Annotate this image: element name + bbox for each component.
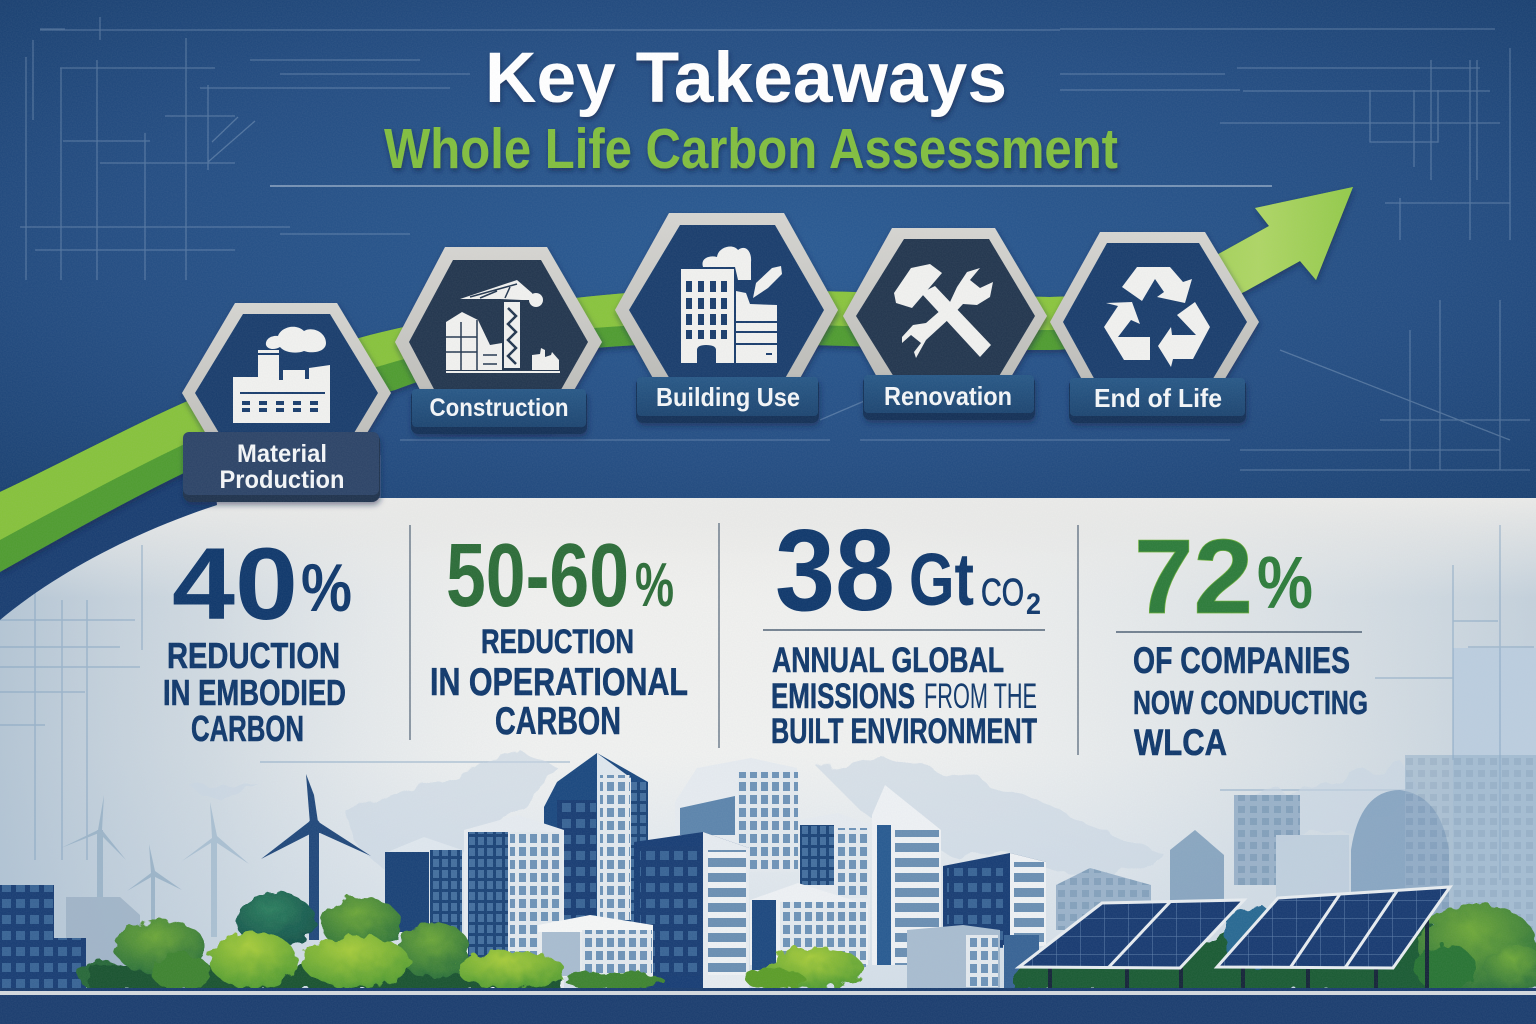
stat: 50-60% reduction in operational carbon: IN OPERATIONAL [430,661,688,704]
step: Renovation [843,228,1047,420]
stat: 50-60% reduction in operational carbon [430,526,688,743]
wrench [902,268,993,358]
recycle arrow right [1158,302,1210,367]
stat: 72% of companies conducting WLCA: NOW CONDUCTING [1133,684,1368,721]
stat: 50-60% reduction in operational carbon: 50-60 [446,526,629,626]
stat: 50-60% reduction in operational carbon: CARBON [495,700,621,743]
stat: 50-60% reduction in operational carbon: % [635,551,674,620]
hammer handle [921,286,991,357]
label: End of Life [1069,378,1246,423]
label: Construction [411,389,587,434]
icon: recycling arrows [1104,267,1210,367]
label: End of Life: End of Life [1094,383,1222,413]
step: Construction [395,247,602,434]
panel: statistics background [0,498,1536,993]
title: Key Takeaways [485,39,1007,118]
panel: blueprint header background [0,0,1536,500]
recycle arrow left [1104,302,1150,360]
recycle arrow top [1122,267,1192,303]
illustration: trees behind solar panels [1014,904,1536,992]
icon: office building with pencil [681,246,782,363]
stat: 40% reduction in embodied carbon: CARBON [191,708,304,749]
stat: 38 Gt CO2 annual global emissions: ANNUAL GLOBAL [772,641,1004,680]
label: Building Use: Building Use [656,382,800,412]
stat: 38 Gt CO2 annual global emissions: BUILT ENVIRONMENT [771,712,1037,751]
stat: 38 Gt CO2 annual global emissions [763,505,1045,751]
stat: 72% of companies conducting WLCA: 72 [1134,518,1253,636]
illustration: green trees [78,893,863,991]
hammer head [894,264,942,308]
column dividers [410,523,1078,755]
stat: 38 Gt CO2 annual global emissions: EMISSIONS [771,677,915,716]
label: Renovation [863,375,1035,420]
stat: 40% reduction in embodied carbon: % [301,550,352,626]
illustration: faded background skyline [66,755,1536,985]
step: End of Life [1050,232,1259,423]
stat: 40% reduction in embodied carbon: 40 [172,527,298,641]
stat: 72% of companies conducting WLCA: WLCA [1134,722,1227,763]
stat: 38 Gt CO2 annual global emissions: CO [981,572,1024,614]
subtitle: Whole Life Carbon Assessment [384,117,1118,181]
icon: hammer and wrench [894,264,993,358]
stat: 72% of companies conducting WLCA [1116,518,1368,763]
stat: 40% reduction in embodied carbon: IN EMBODIED [163,672,346,713]
icon: factory [233,327,330,423]
stat: 38 Gt CO2 annual global emissions: FROM THE [924,677,1037,716]
illustration: city skyline [0,753,1046,990]
stat: 72% of companies conducting WLCA: % [1257,541,1313,624]
illustration: solar panels [1019,887,1450,988]
label: Building Use [636,377,819,423]
stat: 50-60% reduction in operational carbon: REDUCTION [481,623,634,661]
step: Building Use [615,213,838,423]
label: Material Production: Material [237,440,327,468]
illustration: wind turbines [61,774,371,940]
step: Material Production [182,303,391,502]
label: Material Production: Production [220,466,344,494]
stat: 72% of companies conducting WLCA: OF COMPANIES [1133,640,1350,681]
footer band [0,988,1536,1024]
label: Construction: Construction [430,394,568,422]
stat: 38 Gt CO2 annual global emissions: Gt [909,538,974,621]
stat: 40% reduction in embodied carbon [163,527,352,749]
label: Material Production [183,432,380,502]
arrow: rising green carbon path [0,187,1353,620]
stat: 40% reduction in embodied carbon: REDUCTION [167,635,340,676]
stat: 38 Gt CO2 annual global emissions: 2 [1026,588,1041,621]
stat: 38 Gt CO2 annual global emissions: 38 [775,505,895,635]
icon: tower crane and building [446,280,560,372]
label: Renovation: Renovation [884,381,1012,411]
